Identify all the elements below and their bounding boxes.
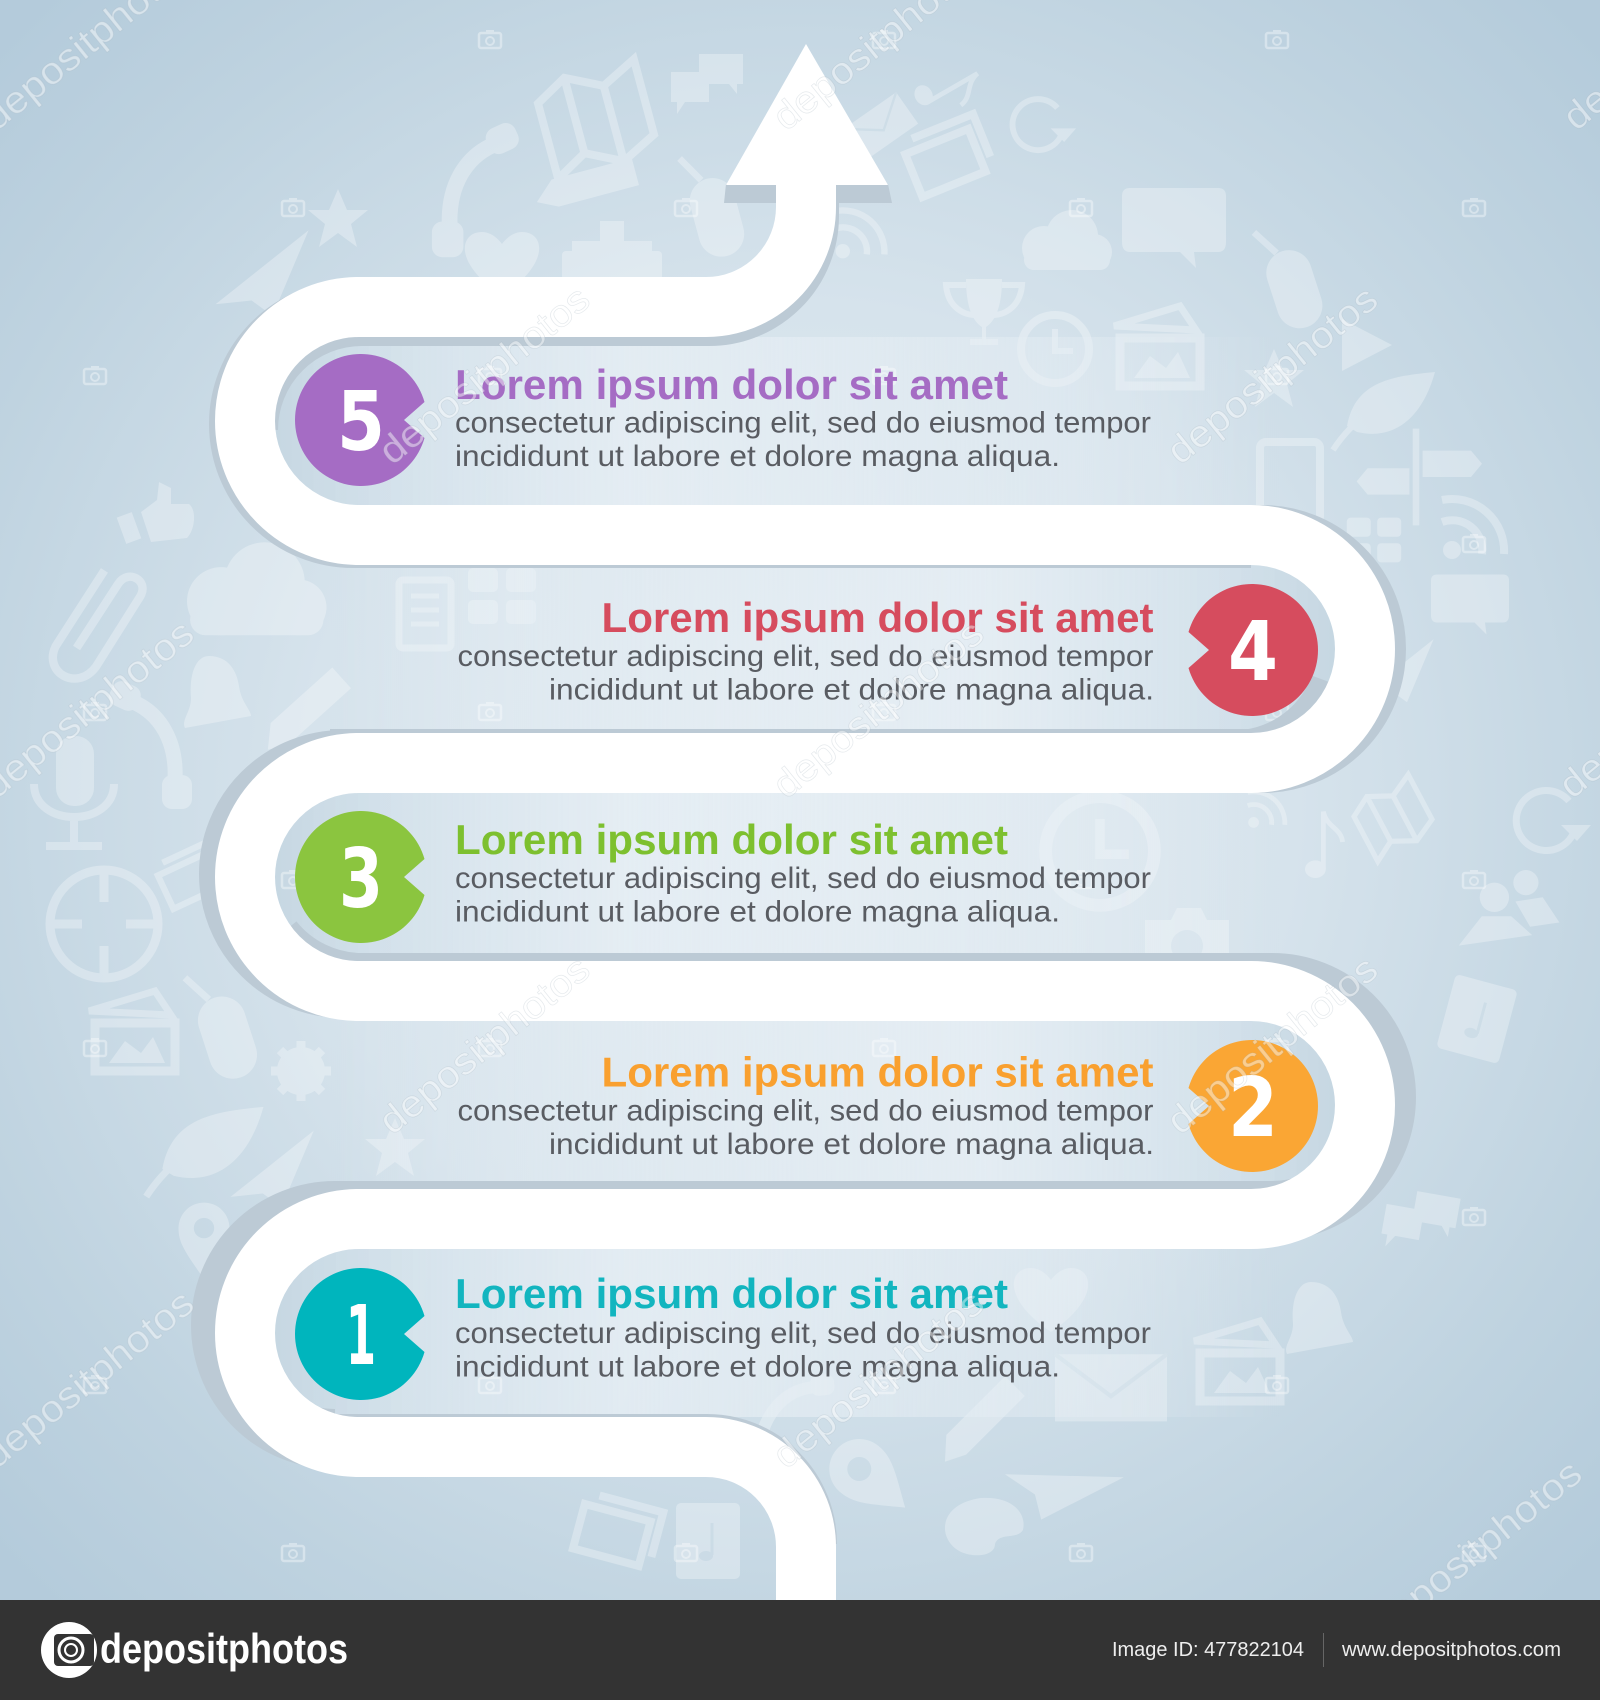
icon: thumb xyxy=(117,482,194,544)
icon: photos xyxy=(901,114,995,197)
image id: Image ID: 477822104 xyxy=(1112,1639,1304,1661)
icon: star left xyxy=(365,1118,425,1176)
body 2: incididunt ut labore et dolore magna aliqua. xyxy=(549,1128,1154,1161)
heading 4: Lorem ipsum dolor sit amet xyxy=(602,594,1154,641)
icon: trophy xyxy=(946,279,1022,345)
icon: plane low xyxy=(998,1417,1124,1543)
body 1: consectetur adipiscing elit, sed do eiusmod tempor xyxy=(455,1317,1151,1350)
icon: document xyxy=(399,580,451,648)
icon: chat arrow xyxy=(1365,639,1434,702)
body 5: consectetur adipiscing elit, sed do eiusmod tempor xyxy=(455,406,1151,440)
icon: phone left xyxy=(106,678,192,809)
icon: paperclip xyxy=(51,567,144,684)
watermarks: depositphotos xyxy=(1363,1452,1590,1647)
step 2 xyxy=(458,1040,1318,1172)
badge 5: 5 xyxy=(337,375,385,470)
badge 1: 1 xyxy=(346,1289,376,1384)
badge 2 xyxy=(1188,1040,1318,1172)
icon: target xyxy=(50,870,158,978)
icon: music card xyxy=(1436,974,1518,1064)
panel 2 background xyxy=(330,1021,1335,1189)
website: www.depositphotos.com xyxy=(1341,1639,1561,1661)
icon: refresh xyxy=(1013,99,1076,150)
body 2: consectetur adipiscing elit, sed do eiusmod tempor xyxy=(458,1094,1154,1128)
icon: bell low xyxy=(1286,1282,1353,1354)
icon: pin low xyxy=(817,1427,925,1531)
icon: cloud xyxy=(1022,210,1112,270)
icon: heart low xyxy=(1014,1268,1088,1332)
icon: leaf left xyxy=(146,1107,264,1197)
icon: card low xyxy=(676,1503,740,1579)
icon: wifi low xyxy=(1248,792,1285,828)
step 1 xyxy=(295,1268,1151,1400)
icon: microphone xyxy=(34,736,114,846)
icon: remote xyxy=(1252,219,1328,334)
icon: clock xyxy=(1021,315,1089,383)
icon: wifi right xyxy=(1442,499,1504,559)
icon: mouse xyxy=(678,147,749,262)
icon: phone low xyxy=(741,1353,842,1475)
panels xyxy=(275,337,1335,1417)
badge 3: 3 xyxy=(339,832,383,927)
icon: pencil left xyxy=(256,667,351,757)
icon: palette xyxy=(945,1498,1024,1555)
icon: grid right xyxy=(1347,518,1401,562)
icon: paper plane xyxy=(216,230,309,316)
step 5 xyxy=(295,354,1151,486)
icon: grid xyxy=(468,568,536,624)
icon: plane left xyxy=(230,1131,314,1207)
icon: refresh low xyxy=(1516,791,1591,851)
footer logo: depositphotos xyxy=(100,1625,348,1672)
body 5: incididunt ut labore et dolore magna aliqua. xyxy=(455,440,1060,473)
step 3 xyxy=(295,811,1151,943)
body 4: consectetur adipiscing elit, sed do eiusmod tempor xyxy=(458,640,1154,673)
icon: users xyxy=(1459,870,1560,946)
icon: note low xyxy=(1305,812,1343,878)
watermarks: depositphotos xyxy=(1159,948,1386,1143)
icon: leaf xyxy=(1333,372,1435,450)
icon: speech bubble xyxy=(1122,188,1226,268)
icon: bell xyxy=(184,656,251,728)
watermarks: depositphotos xyxy=(1159,278,1386,473)
icon: star right xyxy=(1244,349,1304,407)
arrowhead xyxy=(726,44,888,185)
icon: pencil xyxy=(532,158,639,212)
icon: speech right xyxy=(1431,574,1509,634)
icon: heart xyxy=(465,232,539,296)
icon: wifi xyxy=(835,210,884,258)
panel 3 background xyxy=(275,793,1280,961)
heading 1: Lorem ipsum dolor sit amet xyxy=(455,1270,1008,1317)
body 3: incididunt ut labore et dolore magna aliqua. xyxy=(455,896,1060,928)
panel 5 background xyxy=(275,337,1280,505)
watermarks: depositphotos xyxy=(371,278,598,473)
icon: map xyxy=(533,59,659,179)
icon: cloud upload xyxy=(187,542,326,635)
footer logo xyxy=(41,1622,348,1678)
ribbon shadows xyxy=(221,193,1386,1544)
step 4 xyxy=(458,584,1318,716)
icon: picture low xyxy=(1194,1321,1280,1401)
icon: music xyxy=(911,57,987,123)
badge 4: 4 xyxy=(1228,605,1278,700)
badge 5 xyxy=(295,354,424,486)
heading 5: Lorem ipsum dolor sit amet xyxy=(455,361,1008,408)
icon: tablet xyxy=(1260,442,1320,522)
footer bar xyxy=(0,1600,1600,1700)
badge 3 xyxy=(295,811,424,943)
arrowhead shadow xyxy=(724,184,892,203)
heading 3: Lorem ipsum dolor sit amet xyxy=(455,816,1008,863)
icon: star xyxy=(308,189,368,247)
badge 4 xyxy=(1188,584,1318,716)
icon: picture left xyxy=(89,991,175,1071)
icon: mouse left xyxy=(183,964,263,1085)
watermarks: depositphotos xyxy=(765,612,992,807)
panel 4 background xyxy=(330,565,1335,733)
icon: gear xyxy=(271,1041,331,1101)
watermarks: depositphotos xyxy=(765,1282,992,1477)
body 3: consectetur adipiscing elit, sed do eiusmod tempor xyxy=(455,862,1151,895)
watermarks: depositphotos xyxy=(371,948,598,1143)
icon: photos left xyxy=(154,840,230,909)
icon: envelope xyxy=(844,92,918,160)
icon: chat low xyxy=(1379,1186,1461,1258)
icon: chat xyxy=(671,54,743,114)
stock camera marks xyxy=(84,30,1485,1561)
icon: photos low xyxy=(573,1492,663,1569)
icon: stamp xyxy=(562,221,662,301)
icon: pencil low xyxy=(932,1376,1025,1469)
winding arrow ribbon xyxy=(245,44,1365,1600)
badge 1 xyxy=(295,1268,424,1400)
badge 2: 2 xyxy=(1228,1061,1278,1156)
icon: camera mid xyxy=(1145,908,1229,970)
icon: play xyxy=(1342,319,1392,371)
icon: clock mid xyxy=(1046,797,1154,905)
icon: pin left xyxy=(178,1203,230,1279)
body 1: incididunt ut labore et dolore magna aliqua. xyxy=(455,1350,1060,1384)
icon: map low xyxy=(1349,775,1437,861)
heading 2: Lorem ipsum dolor sit amet xyxy=(602,1048,1154,1096)
icon: phone xyxy=(432,120,522,257)
icon: signpost xyxy=(1357,429,1482,525)
panel 1 background xyxy=(275,1249,1280,1417)
icon: pictures xyxy=(1114,306,1200,386)
body 4: incididunt ut labore et dolore magna aliqua. xyxy=(549,674,1154,706)
icon: envelope low xyxy=(1055,1354,1167,1421)
